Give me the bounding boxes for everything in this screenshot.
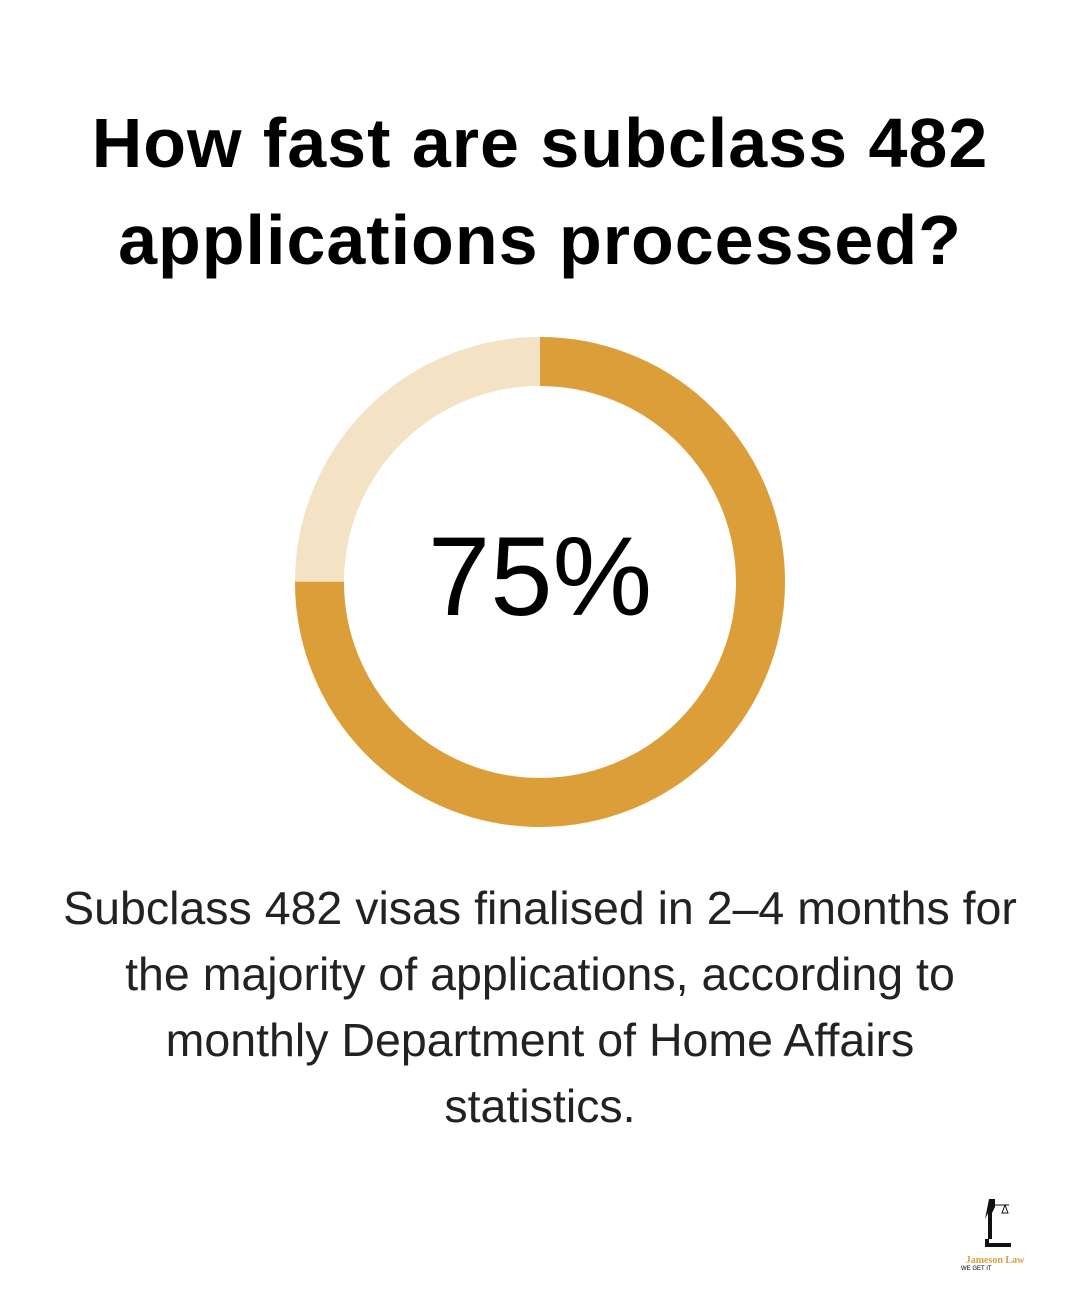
title: How fast are subclass 482 (92, 104, 988, 182)
title: applications processed? (118, 201, 962, 279)
logo (961, 1199, 1024, 1272)
title (92, 104, 988, 279)
logo: WE GET IT (961, 1266, 992, 1272)
description text: monthly Department of Home Affairs (166, 1014, 914, 1066)
donut chart: 75% (428, 514, 652, 639)
description text (63, 882, 1017, 1132)
description text: Subclass 482 visas finalised in 2–4 months for (63, 882, 1017, 934)
donut chart (295, 337, 785, 827)
description text: statistics. (444, 1080, 636, 1132)
description text: the majority of applications, according to (125, 948, 955, 1000)
logo: Jameson Law (966, 1255, 1024, 1266)
